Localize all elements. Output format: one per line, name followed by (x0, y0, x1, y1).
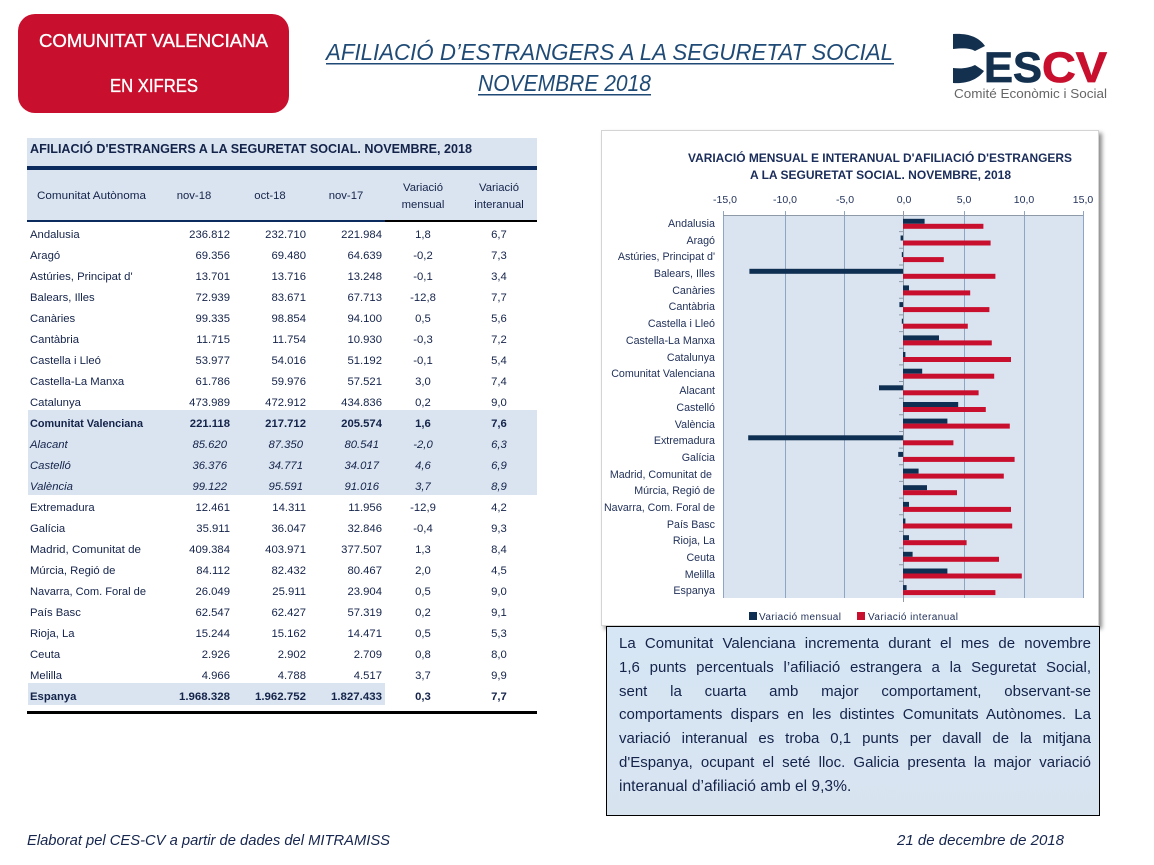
chart title (688, 150, 1072, 182)
row: Rioja: 5,3 (491, 628, 507, 640)
category labels: Castella-La Manxa (626, 335, 715, 347)
row: Castella-La Manxa: 59.976 (271, 376, 306, 388)
row: Melilla: 4.966 (202, 670, 230, 682)
row: Catalunya: 0,2 (415, 397, 431, 409)
category labels: Aragó (686, 235, 715, 247)
table header row (37, 182, 524, 211)
row: Castella-La Manxa: 61.786 (195, 376, 230, 388)
row: Aragó: 69.480 (271, 250, 306, 262)
row: Ceuta: 0,8 (415, 649, 431, 661)
row: Espanya: 1.962.752 (255, 691, 306, 703)
row: Ceuta: 2.902 (278, 649, 306, 661)
category labels: Catalunya (667, 352, 715, 364)
row: Melilla: 3,7 (415, 670, 431, 682)
row: País Basc: 9,1 (491, 607, 507, 619)
row: Rioja: Rioja, La (30, 628, 75, 640)
category labels: Alacant (679, 385, 715, 397)
row: Múrcia: 2,0 (415, 565, 431, 577)
row: Galícia (30, 523, 507, 535)
row: Extremadura: 4,2 (491, 502, 507, 514)
row: Ceuta: 8,0 (491, 649, 507, 661)
row: Rioja (30, 628, 507, 640)
row: Navarra (30, 586, 507, 598)
category labels: Melilla (685, 569, 715, 581)
plot area (723, 211, 1084, 602)
row: Extremadura: 12.461 (195, 502, 230, 514)
row: Castelló: 4,6 (415, 460, 432, 472)
row: Espanya: 7,7 (491, 691, 507, 703)
row: València: 99.122 (192, 481, 228, 493)
row: Astúries: 13.701 (195, 271, 230, 283)
row: Balears: Balears, Illes (30, 292, 95, 304)
row: Canàries: 5,6 (491, 313, 507, 325)
row: Castella-La Manxa: Castella-La Manxa (30, 376, 125, 388)
badge: Comunitat Valenciana en xifres (18, 14, 289, 113)
logo: CES CV (953, 34, 1107, 101)
category labels: Ceuta (686, 552, 715, 564)
row: Canàries: 99.335 (195, 313, 230, 325)
row: Andalusia: 236.812 (189, 229, 230, 241)
table header row: Variació (479, 182, 519, 194)
x axis labels: 10,0 (1014, 194, 1034, 206)
table header row: mensual (402, 199, 444, 211)
text box: commentary: d'Espanya, ocupant el seté lloc. Galicia presenta la major variació (619, 754, 1091, 771)
row: Andalusia (30, 229, 507, 241)
row: País Basc: 0,2 (415, 607, 431, 619)
row: Rioja: 0,5 (415, 628, 431, 640)
row: Cantàbria: 10.930 (347, 334, 382, 346)
row: Castella-La Manxa: 7,4 (491, 376, 507, 388)
category labels: Extremadura (654, 435, 715, 447)
panel: data table (27, 138, 537, 714)
row: Balears (30, 292, 507, 304)
category labels: Múrcia, Regió de (634, 485, 715, 497)
row: Balears: 67.713 (347, 292, 382, 304)
row: Múrcia (30, 565, 507, 577)
row: Aragó: 64.639 (347, 250, 382, 262)
row: Astúries: Astúries, Principat d' (30, 271, 133, 283)
row: Múrcia: Múrcia, Regió de (30, 565, 115, 577)
row: Catalunya (30, 397, 507, 409)
row: València: València (30, 481, 73, 493)
table header row: oct-18 (254, 190, 286, 202)
row: Andalusia: 232.710 (265, 229, 306, 241)
row: Cantàbria: -0,3 (413, 334, 433, 346)
table header row: nov-18 (177, 190, 211, 202)
row: Ceuta: Ceuta (30, 649, 61, 661)
logo: CES CV: ES (984, 44, 1042, 92)
row: Castelló (30, 460, 508, 472)
row: Canàries: Canàries (30, 313, 76, 325)
row: Galícia: Galícia (30, 523, 66, 535)
row: Castelló: 34.771 (268, 460, 303, 472)
row: Espanya: 1.827.433 (331, 691, 382, 703)
row: Madrid: 377.507 (341, 544, 382, 556)
row: Aragó: -0,2 (413, 250, 433, 262)
row: Extremadura: 11.956 (348, 502, 382, 514)
row: Balears: 83.671 (271, 292, 306, 304)
table header row: interanual (474, 199, 524, 211)
row: Castella i Lleó: 5,4 (491, 355, 507, 367)
row: Múrcia: 84.112 (196, 565, 230, 577)
row: Aragó: 69.356 (195, 250, 230, 262)
row: Galícia: 32.846 (347, 523, 382, 535)
row: Melilla: 4.517 (354, 670, 382, 682)
title (324, 39, 894, 96)
series: variació mensual (748, 219, 958, 590)
row: Rioja: 15.244 (195, 628, 230, 640)
category labels: Cantàbria (669, 301, 715, 313)
row: Cantàbria: 11.754 (272, 334, 306, 346)
row: Navarra: 26.049 (195, 586, 230, 598)
footer source: Elaborat pel CES-CV a partir de dades del MITRAMISS (27, 832, 390, 849)
row: Castella i Lleó: 51.192 (347, 355, 382, 367)
row: Astúries: 13.716 (271, 271, 306, 283)
category labels: Galícia (682, 452, 715, 464)
row: Melilla: 9,9 (491, 670, 507, 682)
row: Canàries: 98.854 (271, 313, 306, 325)
row: Balears: -12,8 (410, 292, 436, 304)
category labels: Espanya (673, 585, 715, 597)
row: Andalusia: 221.984 (341, 229, 382, 241)
row: País Basc: 57.319 (347, 607, 382, 619)
row: Castelló: Castelló (30, 460, 71, 472)
row: Alacant (29, 439, 508, 451)
row: Andalusia: 6,7 (491, 229, 507, 241)
logo: CES CV: Comité Econòmic i Social (954, 86, 1107, 101)
category labels: Madrid, Comunitat de (610, 469, 712, 481)
legend: Variació mensual (759, 612, 841, 623)
row: Castella-La Manxa: 3,0 (415, 376, 431, 388)
row: Alacant: 6,3 (491, 439, 508, 451)
row: Melilla: 4.788 (278, 670, 306, 682)
category labels: Andalusia (668, 218, 715, 230)
row: Galícia: 35.911 (196, 523, 230, 535)
row: Múrcia: 80.467 (347, 565, 382, 577)
row: Aragó: 7,3 (491, 250, 507, 262)
row: Extremadura: Extremadura (30, 502, 95, 514)
row: Alacant: 87.350 (268, 439, 304, 451)
row: Castella i Lleó: -0,1 (413, 355, 433, 367)
row: Andalusia: Andalusia (30, 229, 80, 241)
row: Castelló: 6,9 (491, 460, 508, 472)
row: Madrid (30, 544, 507, 556)
category labels: Castella i Lleó (648, 318, 715, 330)
x axis labels: 0,0 (897, 194, 911, 206)
category labels: València (675, 419, 715, 431)
row: Madrid: Madrid, Comunitat de (30, 544, 141, 556)
row: Navarra: 25.911 (272, 586, 306, 598)
row: Melilla (30, 670, 507, 682)
row: Extremadura (30, 502, 507, 514)
row: Espanya: Espanya (30, 691, 77, 703)
legend (749, 612, 958, 623)
chart title: A LA SEGURETAT SOCIAL. NOVEMBRE, 2018 (750, 168, 1011, 182)
title: AFILIACIÓ D’ESTRANGERS A LA SEGURETAT SOCIAL (324, 39, 893, 65)
row: Rioja: 14.471 (347, 628, 382, 640)
text box: commentary: comportaments dispars en les distintes Comunitats Autònomes. La (619, 706, 1091, 723)
row: Canàries (30, 313, 507, 325)
logo: CES CV: CV (1042, 44, 1107, 92)
row: València: 8,9 (491, 481, 508, 493)
row: València: 3,7 (415, 481, 432, 493)
row: Cantàbria: 7,2 (491, 334, 507, 346)
chart title: VARIACIÓ MENSUAL E INTERANUAL D'AFILIACIÓ D'ESTRANGERS (688, 150, 1072, 165)
x axis labels (713, 194, 1093, 206)
row: Madrid: 409.384 (189, 544, 230, 556)
title: NOVEMBRE 2018 (478, 70, 651, 96)
x axis labels: 5,0 (957, 194, 971, 206)
row: Alacant: -2,0 (413, 439, 433, 451)
panel: bar chart (602, 130, 1098, 626)
row: Comunitat Valenciana: 1,6 (415, 418, 431, 430)
row: Catalunya: 473.989 (189, 397, 230, 409)
row: València: 91.016 (344, 481, 380, 493)
x axis labels: -15,0 (713, 194, 737, 206)
row: Alacant: 85.620 (192, 439, 228, 451)
x axis labels: 15,0 (1073, 194, 1093, 206)
row: Alacant: Alacant (29, 439, 69, 451)
row: Espanya: 0,3 (415, 691, 431, 703)
row: Madrid: 403.971 (265, 544, 306, 556)
category labels: Astúries, Principat d' (618, 251, 715, 263)
category labels: Castelló (676, 402, 715, 414)
x axis labels: -5,0 (836, 194, 854, 206)
badge: Comunitat Valenciana en xifres: COMUNITAT VALENCIANA (39, 30, 269, 51)
table header row: Comunitat Autònoma (37, 190, 147, 202)
series: variació interanual (903, 224, 1022, 595)
text box: commentary: sent la cuarta amb major comportament, observant-se (619, 683, 1091, 700)
row: Balears: 72.939 (195, 292, 230, 304)
row: Castelló: 34.017 (344, 460, 380, 472)
row: Canàries: 0,5 (415, 313, 431, 325)
row: País Basc: 62.547 (195, 607, 230, 619)
row: Catalunya: 472.912 (265, 397, 306, 409)
text box: commentary: 1,6 punts percentuals l’afiliació estrangera a la Seguretat Social, (619, 659, 1091, 676)
row: Cantàbria: Cantàbria (30, 334, 80, 346)
category labels: Comunitat Valenciana (611, 368, 715, 380)
row: Rioja: 15.162 (271, 628, 306, 640)
row: Catalunya: 434.836 (341, 397, 382, 409)
row: Navarra: 0,5 (415, 586, 431, 598)
row: Balears: 7,7 (491, 292, 507, 304)
row: Castella i Lleó: 53.977 (195, 355, 230, 367)
category labels: Rioja, La (673, 535, 715, 547)
row: Catalunya: Catalunya (30, 397, 82, 409)
row: Múrcia: 82.432 (271, 565, 306, 577)
row: País Basc (30, 607, 507, 619)
row: Extremadura: -12,9 (410, 502, 436, 514)
row: Castella-La Manxa: 57.521 (347, 376, 382, 388)
row: Alacant: 80.541 (344, 439, 379, 451)
table header row: nov-17 (329, 190, 363, 202)
legend: Variació interanual (868, 612, 958, 623)
badge: Comunitat Valenciana en xifres: EN XIFRES (110, 75, 198, 96)
row: Astúries: 13.248 (347, 271, 382, 283)
row: País Basc: País Basc (30, 607, 81, 619)
row: Comunitat Valenciana: 217.712 (265, 418, 306, 430)
text box: commentary: La Comunitat Valenciana incrementa durant el mes de novembre (619, 635, 1091, 652)
row: Madrid: 8,4 (491, 544, 507, 556)
category labels: Balears, Illes (654, 268, 715, 280)
row: Castella i Lleó (30, 355, 507, 367)
category labels: Canàries (672, 285, 715, 297)
row: Navarra: 9,0 (491, 586, 507, 598)
row: Galícia: -0,4 (413, 523, 433, 535)
row: Navarra: Navarra, Com. Foral de (30, 586, 146, 598)
row: Castella i Lleó: 54.016 (271, 355, 306, 367)
row: Astúries (30, 271, 507, 283)
x axis labels: -10,0 (773, 194, 797, 206)
row: València (30, 481, 508, 493)
row: Andalusia: 1,8 (415, 229, 431, 241)
row: València: 95.591 (268, 481, 303, 493)
row: Madrid: 1,3 (415, 544, 431, 556)
table header row: Variació (403, 182, 443, 194)
row: Múrcia: 4,5 (491, 565, 507, 577)
row: Navarra: 23.904 (347, 586, 382, 598)
table heading: AFILIACIÓ D'ESTRANGERS A LA SEGURETAT SOCIAL. NOVEMBRE, 2018 (30, 141, 472, 156)
text box: commentary: variació interanual es troba 0,1 punts per davall de la mitjana (619, 730, 1091, 747)
row: Extremadura: 14.311 (272, 502, 306, 514)
row: Comunitat Valenciana: 7,6 (491, 418, 507, 430)
category labels: Navarra, Com. Foral de (604, 502, 715, 514)
row: Espanya: 1.968.328 (179, 691, 230, 703)
row: Galícia: 36.047 (271, 523, 306, 535)
row: Catalunya: 9,0 (491, 397, 507, 409)
row: País Basc: 62.427 (271, 607, 306, 619)
category labels (604, 218, 716, 597)
row: Espanya (30, 691, 507, 703)
footer date: 21 de decembre de 2018 (896, 832, 1065, 849)
row: Canàries: 94.100 (347, 313, 382, 325)
text box: commentary (606, 626, 1100, 816)
row: Castella i Lleó: Castella i Lleó (30, 355, 101, 367)
row: Castelló: 36.376 (192, 460, 228, 472)
row: Aragó (30, 250, 507, 262)
row: Castella-La Manxa (30, 376, 507, 388)
row: Comunitat Valenciana: 205.574 (341, 418, 383, 430)
row: Ceuta (30, 649, 507, 661)
row: Astúries: -0,1 (413, 271, 433, 283)
row: Cantàbria: 11.715 (196, 334, 230, 346)
row: Comunitat Valenciana: Comunitat Valenciana (30, 418, 144, 430)
row: Comunitat Valenciana (30, 418, 507, 430)
row: Melilla: Melilla (30, 670, 63, 682)
row: Ceuta: 2.709 (354, 649, 382, 661)
row: Aragó: Aragó (30, 250, 60, 262)
row: Cantàbria (30, 334, 507, 346)
row: Comunitat Valenciana: 221.118 (190, 418, 230, 430)
row: Astúries: 3,4 (491, 271, 507, 283)
row: Ceuta: 2.926 (202, 649, 230, 661)
category labels: País Basc (667, 519, 716, 531)
row: Galícia: 9,3 (491, 523, 507, 535)
text box: commentary: interanual d’afiliació amb el 9,3%. (619, 778, 851, 795)
